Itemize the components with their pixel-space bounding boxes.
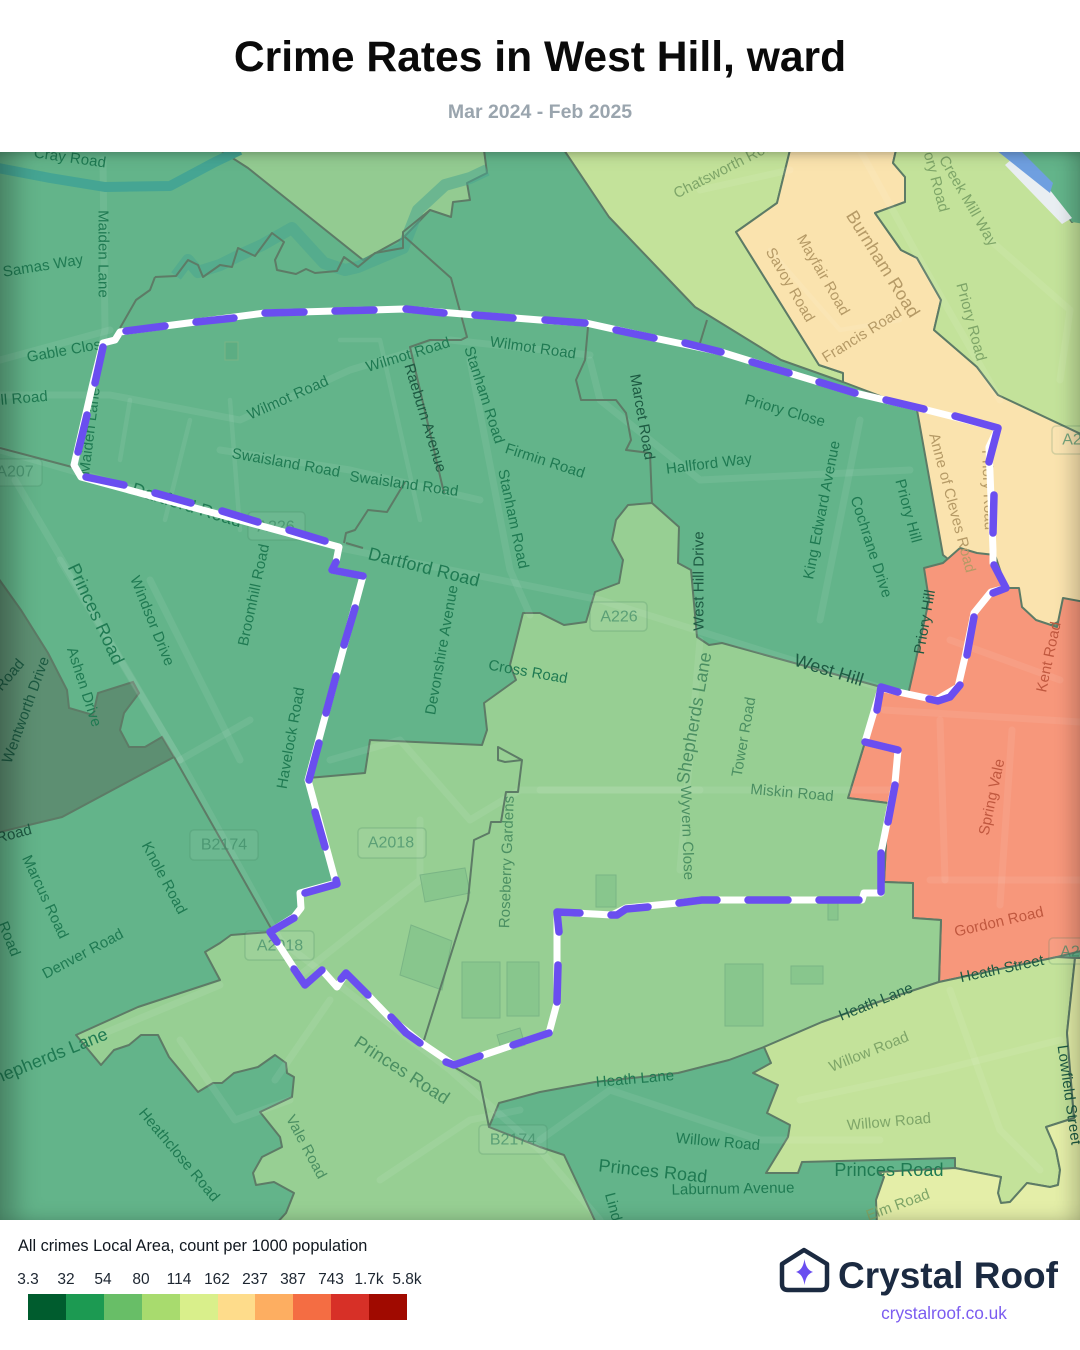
road labels: Kent Road [1033, 620, 1065, 694]
road labels: Hallford Way [665, 450, 753, 478]
road labels: Priory Road [978, 450, 998, 530]
road labels: Swaisland Road [230, 445, 342, 481]
road labels: Maiden Lane [76, 386, 104, 476]
road labels: Firmin Road [503, 440, 587, 482]
road labels: Ashen Drive [63, 645, 105, 729]
road labels: Willow Road [827, 1028, 911, 1076]
building plots [225, 342, 838, 1052]
road labels: Laburnum Avenue [671, 1179, 795, 1199]
icon: house with star [780, 1248, 830, 1292]
road labels: Spring Vale [976, 757, 1008, 837]
area: high crime salmon [848, 548, 1080, 982]
road labels: Wentworth Drive [0, 654, 53, 766]
legend colour bar [28, 1294, 407, 1320]
road labels: Princes Road [598, 1155, 708, 1187]
legend scale labels: 54 [94, 1271, 112, 1288]
road shields [0, 426, 1080, 1154]
road labels: Burnham Road [842, 207, 924, 321]
legend scale labels: 387 [280, 1271, 306, 1288]
road labels: Priory Road [952, 281, 990, 363]
road labels: Wilmot Road [489, 334, 577, 362]
area: south-east low band [753, 957, 1075, 1203]
road labels: Cochrane Drive [847, 494, 895, 600]
road labels: Mayfair Road [793, 232, 853, 318]
road labels: Samas Way [2, 251, 85, 281]
logo url: crystalroof.co.uk [881, 1303, 1007, 1323]
road labels: Heath Street [958, 952, 1046, 986]
road labels: West Hill [792, 650, 866, 690]
area: central light green [76, 503, 941, 1225]
road labels: Vale Road [282, 1112, 330, 1182]
road labels: Heath Lane [836, 979, 916, 1025]
area: south-west dark grey-green [0, 575, 174, 833]
logo: Crystal Roof [780, 1248, 1058, 1323]
road labels: Roseberry Gardens [496, 795, 518, 929]
ward boundary: purple dashes [78, 309, 1006, 1065]
road labels: Dartford Road [366, 543, 482, 591]
legend scale labels: 1.7k [354, 1271, 384, 1288]
road labels: Tower Road [729, 696, 759, 778]
subtitle: date range: Mar 2024 - Feb 2025 [448, 101, 632, 123]
road shields: B2174 [490, 1132, 536, 1148]
area: north-east cream band [736, 150, 1080, 630]
road labels: Windsor Drive [126, 574, 178, 668]
road labels: Knole Road [138, 839, 190, 917]
road labels: Princes Road [351, 1032, 453, 1108]
road labels: Willow Road [675, 1130, 761, 1154]
legend scale labels [17, 1271, 422, 1288]
road labels: Swaisland Road [348, 468, 460, 500]
internal boundaries and rivers [0, 150, 707, 1127]
road labels: Maiden Lane [94, 210, 112, 298]
road labels: Anne of Cleves Road [925, 431, 979, 575]
legend scale labels: 80 [132, 1271, 150, 1288]
legend scale labels: 3.3 [17, 1271, 39, 1288]
road labels: Stanham Road [460, 344, 508, 446]
road network [0, 150, 1080, 1220]
area: north-east low band west [564, 150, 843, 382]
road labels: Francis Road [819, 304, 905, 366]
road labels: Savoy Road [762, 245, 818, 325]
road shields: A226 [600, 608, 638, 626]
road labels: Havelock Road [274, 686, 308, 790]
road labels: Wilmot Road [364, 334, 452, 376]
road labels: Willow Road [846, 1110, 932, 1134]
road labels: Devonshire Avenue [422, 584, 462, 716]
area: south-east pale yellow [876, 958, 1080, 1225]
road labels: Marcet Road [626, 373, 658, 461]
road labels: Denver Road [40, 925, 126, 983]
road labels: Shepherds Lane [673, 651, 715, 785]
road labels: Broomhill Road [235, 542, 273, 648]
road labels: Stanham Road [494, 468, 532, 570]
title: Crime Rates in West Hill, ward [234, 33, 846, 81]
road labels: Gable Clos [25, 336, 103, 366]
road labels: Priory Close [743, 391, 827, 431]
area: north park [220, 150, 487, 260]
road labels: Creek Mill Way [935, 153, 1001, 250]
legend scale labels: 5.8k [392, 1271, 422, 1288]
road labels: Wyvern Close [677, 786, 697, 880]
road shields: A2 [1060, 944, 1080, 960]
area: north-east low band east [875, 150, 1080, 436]
road shields: A2018 [257, 938, 303, 954]
road shields: B2174 [201, 836, 247, 854]
road labels: Dartford Road [129, 479, 245, 531]
map [0, 152, 1080, 1220]
map edge shading [0, 152, 1080, 1220]
logo wordmark: Crystal Roof [838, 1255, 1058, 1296]
road labels: Cross Road [487, 657, 569, 687]
road labels: West Hill Drive [690, 531, 708, 631]
road labels: Priory Hill [911, 588, 939, 656]
road labels: Heath Lane [595, 1067, 675, 1091]
road labels: Marcus Road [18, 852, 72, 942]
legend scale labels: 32 [57, 1271, 75, 1288]
legend scale labels: 237 [242, 1271, 268, 1288]
road labels: Heathclose Road [135, 1105, 223, 1205]
road shields: A226 [257, 518, 295, 536]
legend scale labels: 114 [167, 1271, 191, 1288]
road labels: Gordon Road [953, 903, 1045, 941]
road labels: Princes Road [64, 560, 128, 668]
road labels: King Edward Avenue [800, 439, 844, 581]
legend scale labels: 743 [318, 1271, 344, 1288]
water: top-right river [996, 150, 1080, 224]
road labels: Princes Road [834, 1160, 944, 1180]
legend scale labels: 162 [204, 1271, 230, 1288]
road labels: Wilmot Road [245, 373, 331, 423]
road labels: Raeburn Avenue [400, 362, 450, 474]
ward boundary: white line [74, 309, 1006, 1065]
legend title: All crimes Local Area, count per 1000 population [18, 1237, 367, 1255]
road labels: Miskin Road [750, 781, 834, 805]
road labels: Priory Hill [891, 477, 925, 545]
road shields: A2018 [368, 834, 414, 852]
